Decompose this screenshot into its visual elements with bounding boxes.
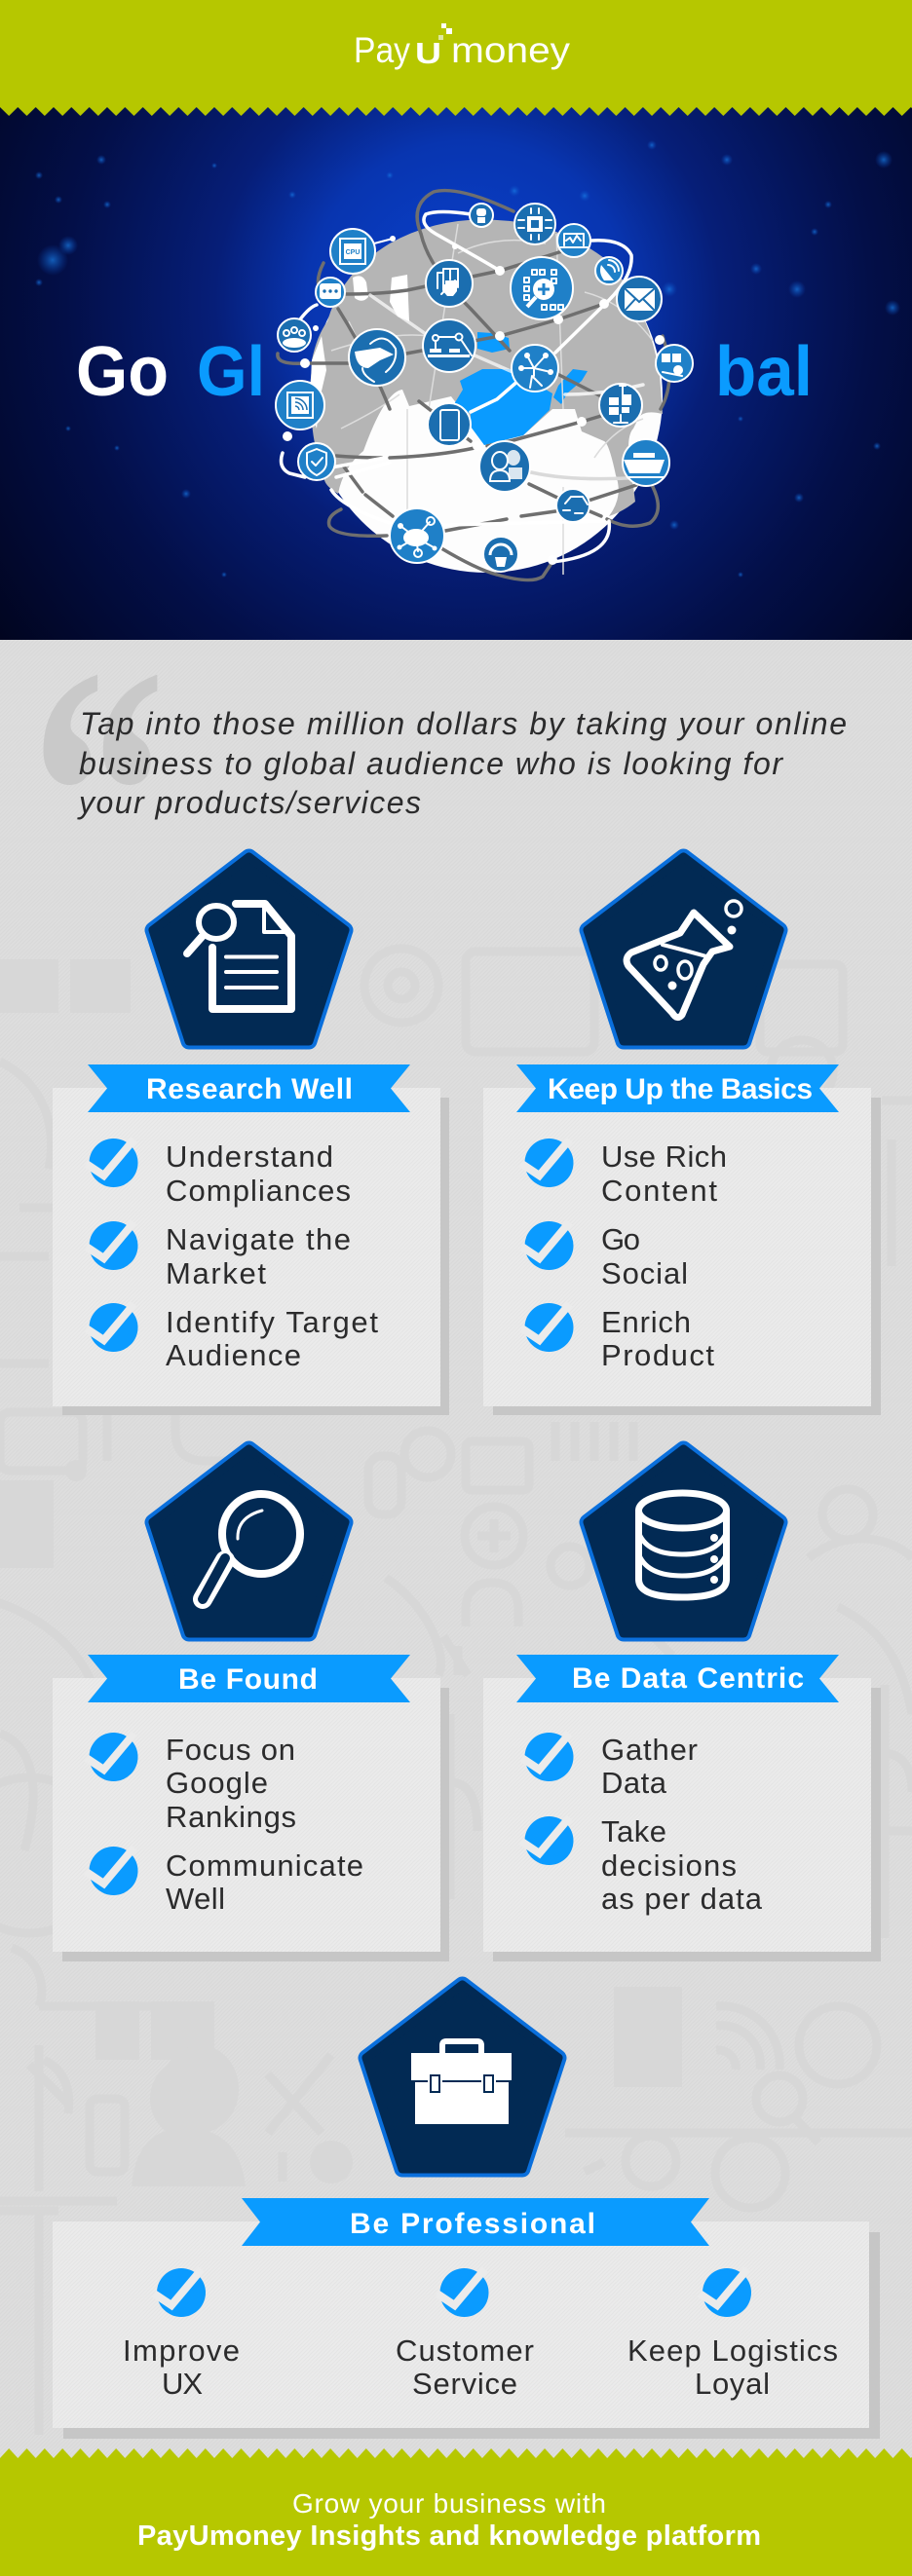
- icon: laptop chart: [557, 224, 590, 257]
- list item: go social: Go: [601, 1222, 640, 1256]
- icon: cloud network: [390, 508, 444, 563]
- ribbon heading: Be Data Centric: [572, 1662, 804, 1695]
- list item: gather data: [522, 1733, 698, 1800]
- logo: PayUmoney: U: [415, 36, 441, 70]
- icon: robot arm small: [556, 489, 589, 522]
- icon: pentagon magnifier: [153, 1449, 345, 1633]
- intro quote text: business to global audience who is looking for: [79, 746, 783, 781]
- list item: enrich product: Enrich: [601, 1305, 691, 1339]
- list item: communicate well: Communicate: [166, 1848, 363, 1883]
- icon: headset: [483, 537, 518, 572]
- footer text: [137, 2488, 761, 2552]
- ribbon heading: [88, 1064, 410, 1112]
- list item: take decisions as per data: [522, 1814, 763, 1916]
- ribbon heading: Keep Up the Basics: [548, 1073, 813, 1105]
- list item: focus on google rankings: Google: [166, 1766, 268, 1800]
- icon: pentagon briefcase: [366, 1985, 558, 2169]
- list item: focus on google rankings: Rankings: [166, 1800, 296, 1834]
- icon: grid magnifier: [511, 257, 573, 319]
- ribbon heading: [88, 1655, 410, 1702]
- list item: use rich content: Content: [601, 1174, 717, 1208]
- footer text: Grow your business with: [292, 2488, 606, 2519]
- item: improve UX: Improve: [123, 2333, 240, 2368]
- icon: shield: [298, 443, 335, 480]
- card shadow and card: [53, 2221, 880, 2439]
- title: bal: bal: [715, 333, 813, 411]
- title: Gl: Gl: [197, 333, 265, 411]
- icon: chat bubble: [316, 278, 345, 307]
- icon: people: [479, 441, 530, 492]
- item: keep logistics loyal: Loyal: [695, 2367, 770, 2401]
- ribbon heading: [516, 1064, 839, 1112]
- icon: CPU: [330, 229, 375, 274]
- icon: microchip: [514, 204, 555, 244]
- India in blue: [454, 332, 588, 445]
- list item: go social: Social: [601, 1256, 688, 1290]
- list item: identify target audience: Audience: [166, 1338, 301, 1372]
- footer text: PayUmoney Insights and knowledge platform: [137, 2520, 761, 2552]
- network icon badges: [276, 204, 693, 572]
- list item: focus on google rankings: [86, 1733, 296, 1834]
- panel: be professional: [53, 1985, 880, 2439]
- icon: satellite dish: [595, 257, 623, 284]
- title: Go: Go: [76, 333, 169, 411]
- card shadow and card: [483, 1678, 881, 1961]
- item: customer service: Service: [412, 2367, 517, 2401]
- list item: focus on google rankings: Focus on: [166, 1733, 295, 1767]
- list item: gather data: Data: [601, 1766, 667, 1800]
- panel: be data centric: [483, 1449, 881, 1961]
- panel: be found: [53, 1449, 449, 1961]
- list item: navigate the market: Market: [166, 1256, 266, 1290]
- card shadow and card: [483, 1088, 881, 1415]
- list item: take decisions as per data: as per data: [601, 1882, 763, 1916]
- logo: PayUmoney: [354, 23, 571, 70]
- intro quote text: your products/services: [77, 785, 421, 820]
- intro quote text: [77, 706, 847, 820]
- logo: PayUmoney: Pay: [354, 30, 410, 70]
- logo: PayUmoney: money: [451, 30, 571, 70]
- list item: understand compliances: Understand: [166, 1139, 333, 1174]
- list item: understand compliances: [86, 1139, 351, 1208]
- icon: pentagon document search: [153, 857, 345, 1041]
- ribbon heading: [516, 1655, 839, 1702]
- panel: research well: [53, 857, 449, 1415]
- icon: touch network: [512, 345, 558, 392]
- icon: ship: [623, 439, 669, 486]
- ribbon heading: Research Well: [146, 1073, 353, 1105]
- icon: team meeting: [278, 318, 311, 352]
- icon: pentagon database: [588, 1449, 779, 1633]
- icon: robot arm: [423, 319, 475, 372]
- card shadow and card: [53, 1088, 449, 1415]
- icon: blocks: [599, 384, 642, 427]
- list item: use rich content: [522, 1139, 727, 1208]
- icon: NFC card: [276, 381, 324, 429]
- hero banner: [0, 107, 912, 640]
- item: improve UX: [123, 2268, 240, 2401]
- list item: communicate well: Well: [166, 1882, 225, 1916]
- list item: navigate the market: [86, 1221, 351, 1290]
- ribbon heading: Be Professional: [350, 2208, 595, 2240]
- icon: conveyor: [656, 345, 693, 382]
- list item: identify target audience: Identify Target: [166, 1305, 378, 1339]
- item: keep logistics loyal: [627, 2268, 838, 2401]
- icon: CPU: CPU: [346, 249, 360, 256]
- ribbon heading: [242, 2198, 709, 2246]
- icon: envelope: [617, 277, 662, 321]
- list item: understand compliances: Compliances: [166, 1174, 351, 1208]
- item: customer service: Customer: [396, 2333, 534, 2368]
- list item: navigate the market: Navigate the: [166, 1222, 351, 1256]
- list item: take decisions as per data: decisions: [601, 1848, 737, 1883]
- intro quote text: Tap into those million dollars by taking your online: [80, 706, 847, 741]
- footer band: [0, 2448, 912, 2576]
- header band: [0, 0, 912, 116]
- card shadow and card: [53, 1678, 449, 1961]
- list item: enrich product: [522, 1303, 714, 1372]
- icon: robot: [470, 204, 493, 227]
- list item: enrich product: Product: [601, 1338, 714, 1372]
- item: keep logistics loyal: Keep Logistics: [627, 2333, 838, 2368]
- icon: tablet: [428, 403, 471, 446]
- list item: go social: [522, 1221, 688, 1290]
- globe sphere with land: [310, 220, 663, 575]
- background pattern of faint icons: [0, 949, 912, 2435]
- item: improve UX: UX: [162, 2367, 203, 2401]
- ribbon heading: Be Found: [178, 1663, 318, 1696]
- quote mark: “: [30, 592, 166, 997]
- icon: smart city: [426, 260, 473, 307]
- list item: communicate well: [86, 1847, 363, 1916]
- panel: keep up the basics: [483, 857, 881, 1415]
- globe illustration: [276, 191, 693, 580]
- icon: VR headset: [349, 329, 405, 386]
- orbit lines: [278, 191, 669, 580]
- list item: use rich content: Use Rich: [601, 1139, 727, 1174]
- list item: gather data: Gather: [601, 1733, 698, 1767]
- icon: pentagon flask: [588, 857, 779, 1041]
- list item: take decisions as per data: Take: [601, 1814, 666, 1848]
- item: customer service: [396, 2268, 534, 2401]
- page background: [0, 633, 912, 2576]
- list item: identify target audience: [86, 1303, 378, 1372]
